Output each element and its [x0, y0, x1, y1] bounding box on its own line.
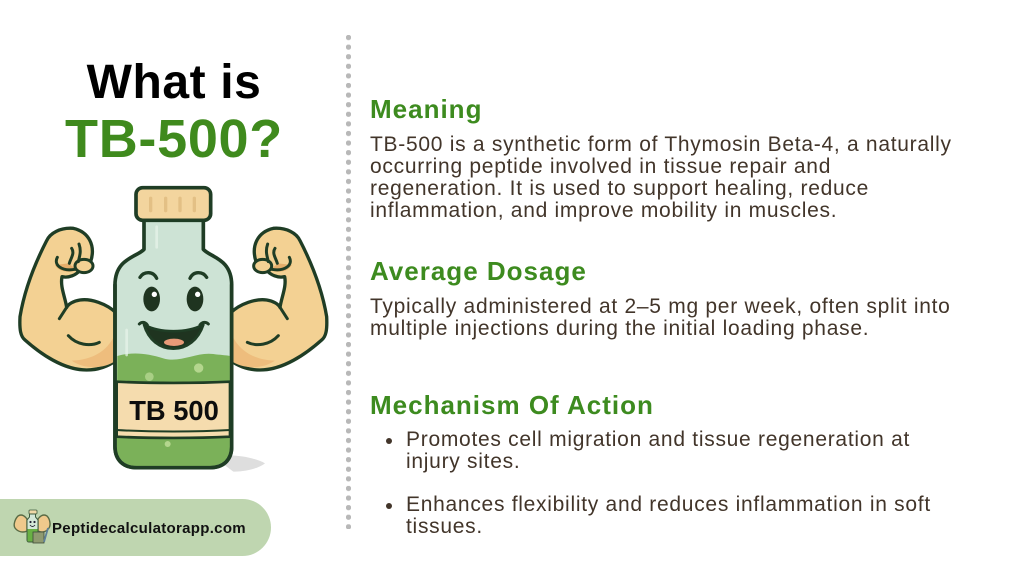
text: dosage [370, 295, 951, 340]
cap [136, 188, 211, 220]
bottle body [115, 220, 232, 468]
bullet 2: Enhances flexibility and reduces inflammation in soft [406, 493, 931, 516]
text: meaning: TB-500 is a synthetic form of Thymosin Beta-4, a naturally [370, 133, 952, 156]
text: meaning: regeneration. It is used to support healing, reduce [370, 177, 869, 200]
bullet 2: tissues. [406, 515, 483, 538]
bullet 2 [406, 493, 931, 538]
right arm [230, 228, 327, 370]
icon: flexing bottle mascot [18, 186, 328, 472]
website pill [0, 499, 271, 556]
left arm [20, 228, 117, 370]
bullet 1 [406, 428, 910, 473]
label [117, 382, 230, 438]
title: What is [87, 56, 261, 109]
text: meaning [370, 133, 952, 222]
heading: mechanism: Mechanism Of Action [370, 390, 654, 420]
title: TB-500? [65, 109, 283, 169]
text: meaning: occurring peptide involved in tissue repair and [370, 155, 831, 178]
liquid [117, 354, 230, 466]
bullet list: mechanism [386, 428, 931, 538]
label text: TB 500 [129, 395, 219, 426]
icon: small bottle logo [14, 510, 51, 544]
dotted divider [346, 35, 351, 529]
title [65, 56, 283, 169]
heading: meaning: Meaning [370, 94, 482, 124]
bullet 1: Promotes cell migration and tissue regeneration at [406, 428, 910, 451]
text: dosage: multiple injections during the initial loading phase. [370, 317, 869, 340]
face [140, 273, 207, 278]
website text: Peptidecalculatorapp.com [52, 520, 246, 537]
heading: average dosage: Average Dosage [370, 256, 587, 286]
text: meaning: inflammation, and improve mobility in muscles. [370, 199, 837, 222]
bullet 1: injury sites. [406, 450, 520, 473]
text: dosage: Typically administered at 2–5 mg per week, often split into [370, 295, 951, 318]
